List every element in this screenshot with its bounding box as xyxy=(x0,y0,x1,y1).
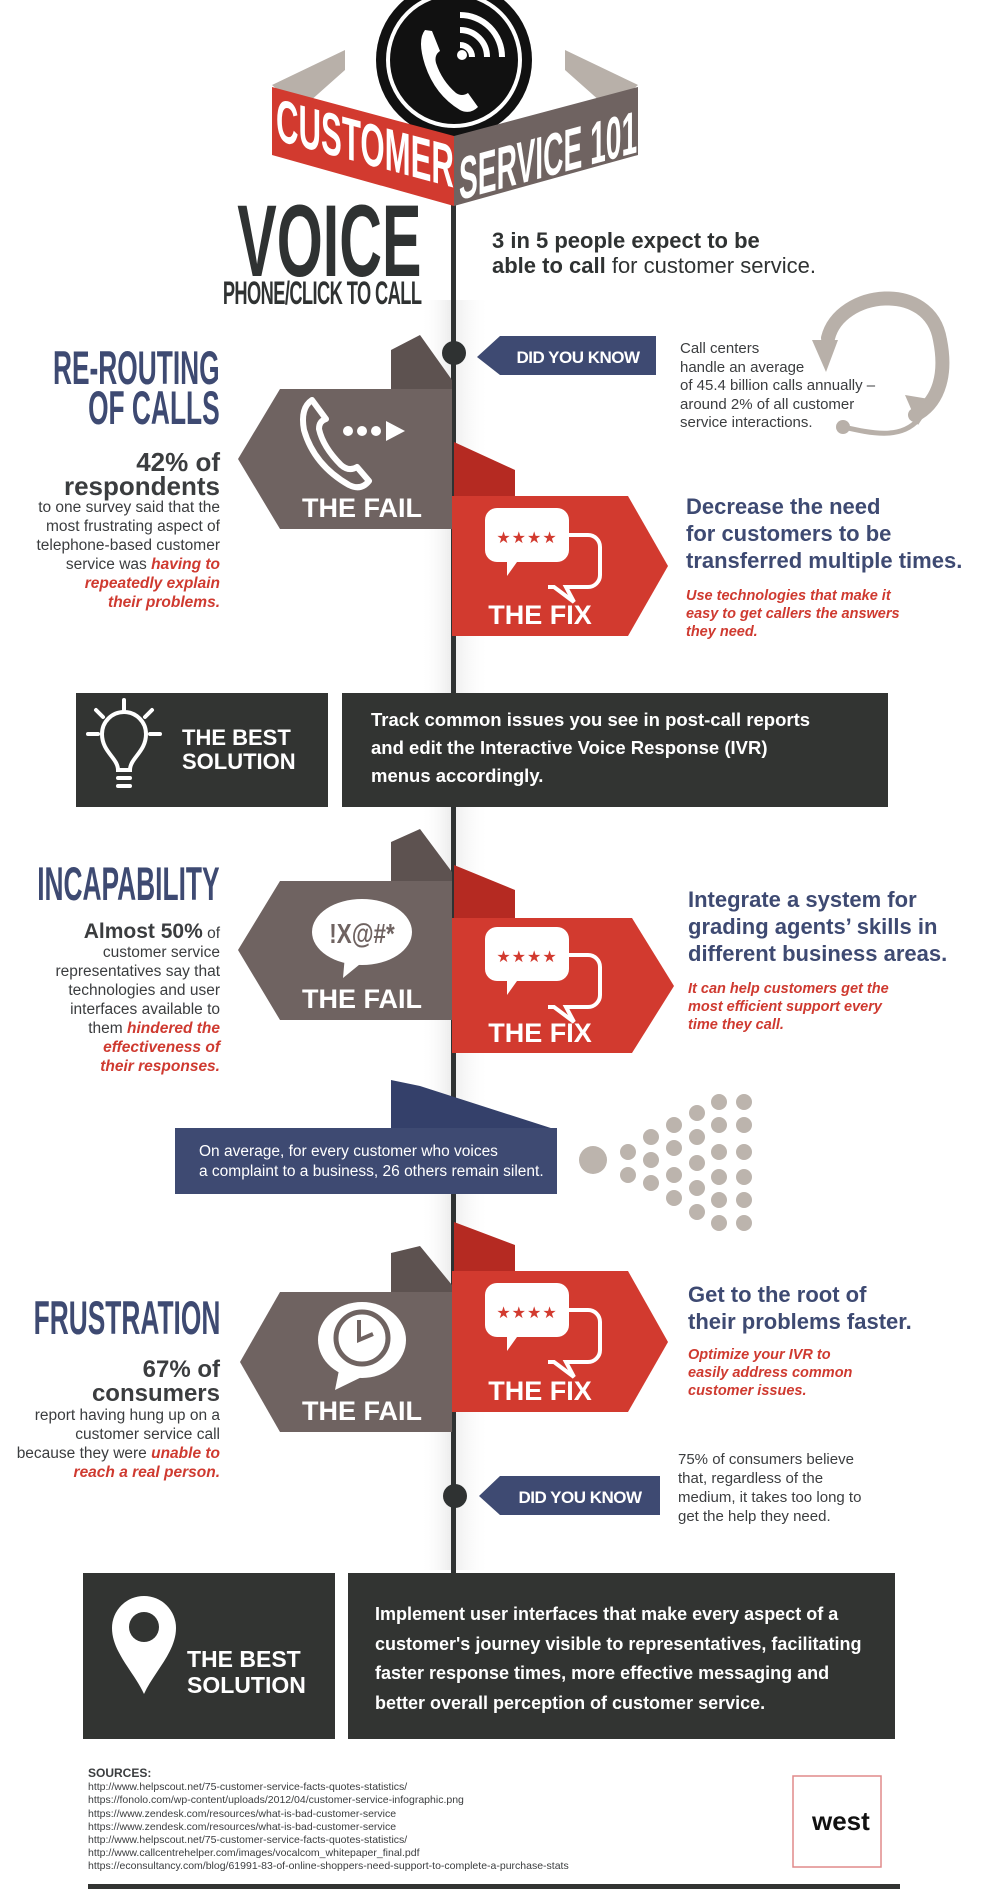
fail text 1 xyxy=(36,447,220,611)
fix text 1: Use technologies that make it xyxy=(686,588,891,604)
fail sign 3: THE FAIL xyxy=(302,1396,422,1426)
best solution 2 text xyxy=(375,1604,861,1713)
intro stat xyxy=(492,228,816,278)
sources: https://www.zendesk.com/resources/what-is-bad-customer-service xyxy=(88,1808,396,1820)
sources: http://www.helpscout.net/75-customer-service-facts-quotes-statistics/ xyxy=(88,1781,407,1793)
sources: http://www.helpscout.net/75-customer-service-facts-quotes-statistics/ xyxy=(88,1834,407,1846)
icon: headset xyxy=(812,298,942,434)
fail text 1: most frustrating aspect of xyxy=(46,518,220,535)
fix text 2: time they call. xyxy=(688,1017,784,1033)
best solution 2 panel xyxy=(83,1573,895,1739)
best solution 2 label xyxy=(187,1646,306,1698)
navy banner text xyxy=(199,1143,544,1180)
did you know text 2: 75% of consumers believe xyxy=(678,1451,854,1468)
navy banner text: On average, for every customer who voices xyxy=(199,1143,498,1160)
west logo: west xyxy=(811,1806,870,1836)
fix text 2: different business areas. xyxy=(688,941,947,966)
fix text 1: transferred multiple times. xyxy=(686,548,962,573)
fail text 1: 42% of xyxy=(136,447,220,477)
header: banner: CUSTOMER xyxy=(276,86,454,201)
heading: re-routing of calls: OF CALLS xyxy=(88,381,220,434)
fail text 3: reach a real person. xyxy=(74,1464,220,1481)
fix text 1: for customers to be xyxy=(686,521,891,546)
best solution 1 label: THE BEST xyxy=(182,725,291,750)
navy banner xyxy=(175,1080,557,1194)
heading: incapability: INCAPABILITY xyxy=(38,857,220,910)
best solution 1 text: and edit the Interactive Voice Response (IVR) xyxy=(371,737,767,758)
fail text 1: respondents xyxy=(64,471,220,501)
best solution 1 text xyxy=(371,709,810,786)
fail text 2: Almost 50% of xyxy=(84,920,220,943)
fail text 3: 67% of xyxy=(143,1356,220,1383)
sources: http://www.callcentrehelper.com/images/vocalcom_whitepaper_final.pdf xyxy=(88,1847,420,1859)
fix sign 1: THE FIX xyxy=(488,600,592,630)
heading: re-routing of calls xyxy=(53,341,220,434)
fix text 1: Decrease the need xyxy=(686,494,880,519)
sources: https://econsultancy.com/blog/61991-83-of-online-shoppers-need-support-to-complete-a-purchase-stats xyxy=(88,1860,569,1872)
fail text 2 xyxy=(55,920,222,1075)
fail text 2: technologies and user xyxy=(68,982,220,999)
fail text 3: because they were unable to xyxy=(17,1445,220,1462)
best solution 1 label xyxy=(182,725,296,774)
did you know text 2 xyxy=(678,1451,861,1525)
fail text 2: their responses. xyxy=(100,1058,220,1075)
fail text 2: interfaces available to xyxy=(70,1001,220,1018)
fix sign 3: ★★★★ xyxy=(496,1305,558,1322)
west logo xyxy=(793,1776,881,1867)
fail text 2: effectiveness of xyxy=(103,1039,220,1056)
fix sign 2: ★★★★ xyxy=(496,949,558,966)
sources: https://fonolo.com/wp-content/uploads/2012/04/customer-service-infographic.png xyxy=(88,1794,464,1806)
fail sign 2: THE FAIL xyxy=(302,984,422,1014)
fix text 3: their problems faster. xyxy=(688,1309,912,1334)
intro stat: able to call for customer service. xyxy=(492,253,816,278)
did you know text 1: handle an average xyxy=(680,358,804,376)
fix text 3: customer issues. xyxy=(688,1383,806,1399)
fail text 2: customer service xyxy=(103,944,220,961)
fail sign 1: THE FAIL xyxy=(302,493,422,523)
did you know tag 1: DID YOU KNOW xyxy=(516,348,641,367)
best solution 2 text: Implement user interfaces that make every aspect of a xyxy=(375,1604,838,1624)
fix text 3: Get to the root of xyxy=(688,1282,866,1307)
fail text 2: representatives say that xyxy=(55,963,220,980)
best solution 2 text: faster response times, more effective messaging and xyxy=(375,1663,829,1683)
header: banner: SERVICE 101 xyxy=(459,98,637,213)
icon: lightbulb xyxy=(88,700,160,786)
did you know text 1: of 45.4 billion calls annually – xyxy=(680,377,875,394)
fix text 2: Integrate a system for xyxy=(688,887,917,912)
fix text 2: It can help customers get the xyxy=(688,981,889,997)
fix text 3: Optimize your IVR to xyxy=(688,1347,831,1363)
did you know tag 2: DID YOU KNOW xyxy=(518,1488,643,1507)
fix text 3 xyxy=(688,1282,912,1399)
fix text 2: most efficient support every xyxy=(688,999,882,1015)
fix sign 1: ★★★★ xyxy=(496,530,558,547)
fail text 3: report having hung up on a xyxy=(35,1407,220,1424)
fail text 1: to one survey said that the xyxy=(38,499,220,516)
did you know text 1: around 2% of all customer xyxy=(680,396,854,412)
title: VOICE: VOICE xyxy=(237,184,421,298)
fail text 1: their problems. xyxy=(108,594,220,611)
sources: https://www.zendesk.com/resources/what-is-bad-customer-service xyxy=(88,1821,396,1833)
best solution 2 text: customer's journey visible to representatives, facilitating xyxy=(375,1634,861,1654)
did you know tag 2 xyxy=(479,1476,660,1515)
subtitle: phone/click to call: PHONE/CLICK TO CALL xyxy=(222,275,421,311)
icon: map pin xyxy=(112,1596,176,1694)
icon: dots spray xyxy=(579,1094,752,1231)
header: banner xyxy=(272,86,638,213)
did you know text 2: that, regardless of the xyxy=(678,1470,823,1487)
fail sign 2 xyxy=(238,829,452,1020)
best solution 2 label: THE BEST xyxy=(187,1646,301,1672)
fix text 1: they need. xyxy=(686,624,758,640)
fix sign 2: THE FIX xyxy=(488,1018,592,1048)
navy banner text: a complaint to a business, 26 others remain silent. xyxy=(199,1163,544,1180)
header: banner flaps xyxy=(272,50,638,110)
dot 1 xyxy=(442,341,466,365)
header: phone circle icon xyxy=(376,0,532,138)
fail text 3: consumers xyxy=(92,1380,220,1407)
fail sign 2: !X@#* xyxy=(329,919,395,950)
did you know tag 1 xyxy=(477,336,656,375)
bottom bar xyxy=(88,1884,900,1889)
did you know text 1 xyxy=(680,340,876,431)
best solution 1 text: menus accordingly. xyxy=(371,765,543,786)
fix sign 1 xyxy=(452,442,668,636)
fix text 2: grading agents’ skills in xyxy=(688,914,937,939)
best solution 2 text: better overall perception of customer service. xyxy=(375,1692,765,1712)
fix sign 2 xyxy=(452,865,674,1053)
heading: re-routing of calls: RE-ROUTING xyxy=(53,341,220,394)
fail text 1: service was having to xyxy=(66,556,220,573)
fix sign 3: THE FIX xyxy=(488,1376,592,1406)
fail sign 3 xyxy=(240,1246,452,1432)
fix text 3: easily address common xyxy=(688,1365,852,1381)
did you know text 2: medium, it takes too long to xyxy=(678,1489,861,1506)
did you know text 2: get the help they need. xyxy=(678,1508,831,1525)
did you know text 1: Call centers xyxy=(680,340,759,357)
did you know text 1: service interactions. xyxy=(680,414,813,431)
best solution 1 text: Track common issues you see in post-call reports xyxy=(371,709,810,730)
fix text 2 xyxy=(688,887,947,1033)
sources: SOURCES: xyxy=(88,1766,151,1780)
dot 2 xyxy=(443,1484,467,1508)
fail sign 1 xyxy=(238,335,452,529)
fail text 3: customer service call xyxy=(75,1426,220,1443)
heading: frustration: FRUSTRATION xyxy=(33,1291,220,1344)
sources xyxy=(88,1766,569,1872)
best solution 1 panel xyxy=(76,693,888,807)
intro stat: 3 in 5 people expect to be xyxy=(492,228,760,253)
timeline line xyxy=(451,200,456,1575)
best solution 2 label: SOLUTION xyxy=(187,1672,306,1698)
fail text 3 xyxy=(17,1356,220,1481)
fix text 1: easy to get callers the answers xyxy=(686,606,900,622)
fix sign 3 xyxy=(452,1222,668,1412)
fail text 1: telephone-based customer xyxy=(36,537,220,554)
fail text 2: them hindered the xyxy=(88,1020,220,1037)
best solution 1 label: SOLUTION xyxy=(182,749,296,774)
fix text 1 xyxy=(686,494,962,640)
fail text 1: repeatedly explain xyxy=(85,575,220,592)
